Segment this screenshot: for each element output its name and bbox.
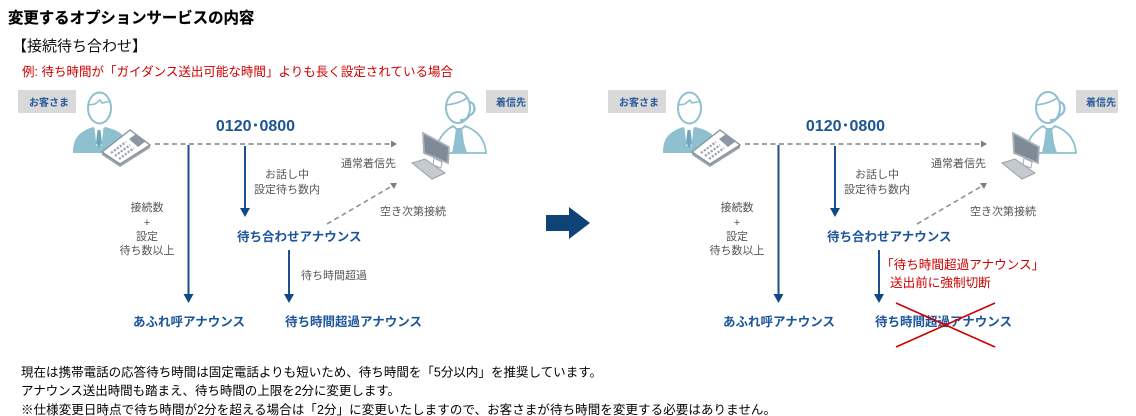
arrow: wait time exceeded xyxy=(284,250,294,303)
dashed arrow: connect when available xyxy=(917,183,987,224)
text: connect when available: 空き次第接続 xyxy=(380,204,446,218)
label: call recipient xyxy=(486,90,528,113)
red cross xyxy=(896,303,995,347)
title: 変更するオプションサービスの内容 xyxy=(8,8,254,27)
text: busy within wait count: お話し中 xyxy=(855,168,899,181)
phone number: 0120･0800 xyxy=(806,118,885,135)
explanatory text: 現在は携帯電話の応答待ち時間は固定電話よりも短いため、待ち時間を「5分以内」を推奨しています。 xyxy=(21,364,602,380)
text: waiting announcement: 待ち合わせアナウンス xyxy=(237,229,362,244)
text: forced disconnect note: 送出前に強制切断 xyxy=(890,275,991,290)
text: connections plus wait count: 接続数 xyxy=(720,200,754,214)
arrow: wait time exceeded xyxy=(874,250,884,303)
label: call recipient xyxy=(1076,90,1118,113)
arrow: to waiting announcement xyxy=(240,146,250,217)
text: overflow announcement: あふれ呼アナウンス xyxy=(133,315,245,329)
label: customer: お客さま xyxy=(619,96,659,109)
panel: diagram after change xyxy=(608,90,1118,347)
arrow: overflow xyxy=(774,145,784,303)
label: customer xyxy=(18,90,76,113)
text: busy within wait count: 設定待ち数内 xyxy=(254,182,320,196)
text: wait time exceeded announcement: 待ち時間超過アナウンス xyxy=(285,314,422,329)
text: busy within wait count: 設定待ち数内 xyxy=(844,182,910,196)
text: connections plus wait count xyxy=(120,200,174,257)
text: connections plus wait count: 待ち数以上 xyxy=(120,243,174,257)
label: customer: お客さま xyxy=(29,96,69,109)
explanatory text: アナウンス送出時間も踏まえ、待ち時間の上限を2分に変更します。 xyxy=(21,383,400,398)
text: connections plus wait count: 設定 xyxy=(726,230,748,243)
icon: customer with telephone xyxy=(663,92,740,167)
text: connections plus wait count: + xyxy=(734,217,740,229)
icon: operator with computer xyxy=(1002,92,1076,179)
text: wait time exceeded announcement: 待ち時間超過アナウンス xyxy=(875,314,1012,329)
label: customer xyxy=(608,90,666,113)
text: forced disconnect note: 「待ち時間超過アナウンス」 xyxy=(881,258,1044,272)
arrow: overflow xyxy=(184,145,194,303)
text: connections plus wait count: 設定 xyxy=(136,230,158,243)
text: normal destination: 通常着信先 xyxy=(931,156,986,170)
text: forced disconnect note xyxy=(881,258,1044,290)
label: call recipient: 着信先 xyxy=(496,96,526,109)
text: connect when available: 空き次第接続 xyxy=(970,204,1036,218)
explanatory text xyxy=(21,364,776,416)
text: busy within wait count xyxy=(844,168,910,196)
text: wait time exceeded: 待ち時間超過 xyxy=(301,268,367,282)
dashed arrow: normal destination xyxy=(745,140,987,148)
arrow: to waiting announcement xyxy=(830,146,840,217)
dashed arrow: normal destination xyxy=(155,140,397,148)
text: waiting announcement: 待ち合わせアナウンス xyxy=(827,229,952,244)
dashed arrow: connect when available xyxy=(327,183,397,224)
text: connections plus wait count xyxy=(710,200,764,257)
text: busy within wait count: お話し中 xyxy=(265,168,309,181)
text: overflow announcement: あふれ呼アナウンス xyxy=(723,315,835,329)
text: busy within wait count xyxy=(254,168,320,196)
icon: customer with telephone xyxy=(73,92,150,167)
text: connections plus wait count: 待ち数以上 xyxy=(710,243,764,257)
phone number: 0120･0800 xyxy=(216,118,295,135)
text: connections plus wait count: + xyxy=(144,217,150,229)
arrow: before to after xyxy=(546,207,590,239)
text: connections plus wait count: 接続数 xyxy=(130,200,164,214)
panel: diagram before change xyxy=(18,90,528,329)
label: call recipient: 着信先 xyxy=(1086,96,1116,109)
subheading: 【接続待ち合わせ】 xyxy=(12,38,147,55)
text: normal destination: 通常着信先 xyxy=(341,156,396,170)
red example note: 例: 待ち時間が「ガイダンス送出可能な時間」よりも長く設定されている場合 xyxy=(22,64,453,79)
icon: operator with computer xyxy=(412,92,486,179)
